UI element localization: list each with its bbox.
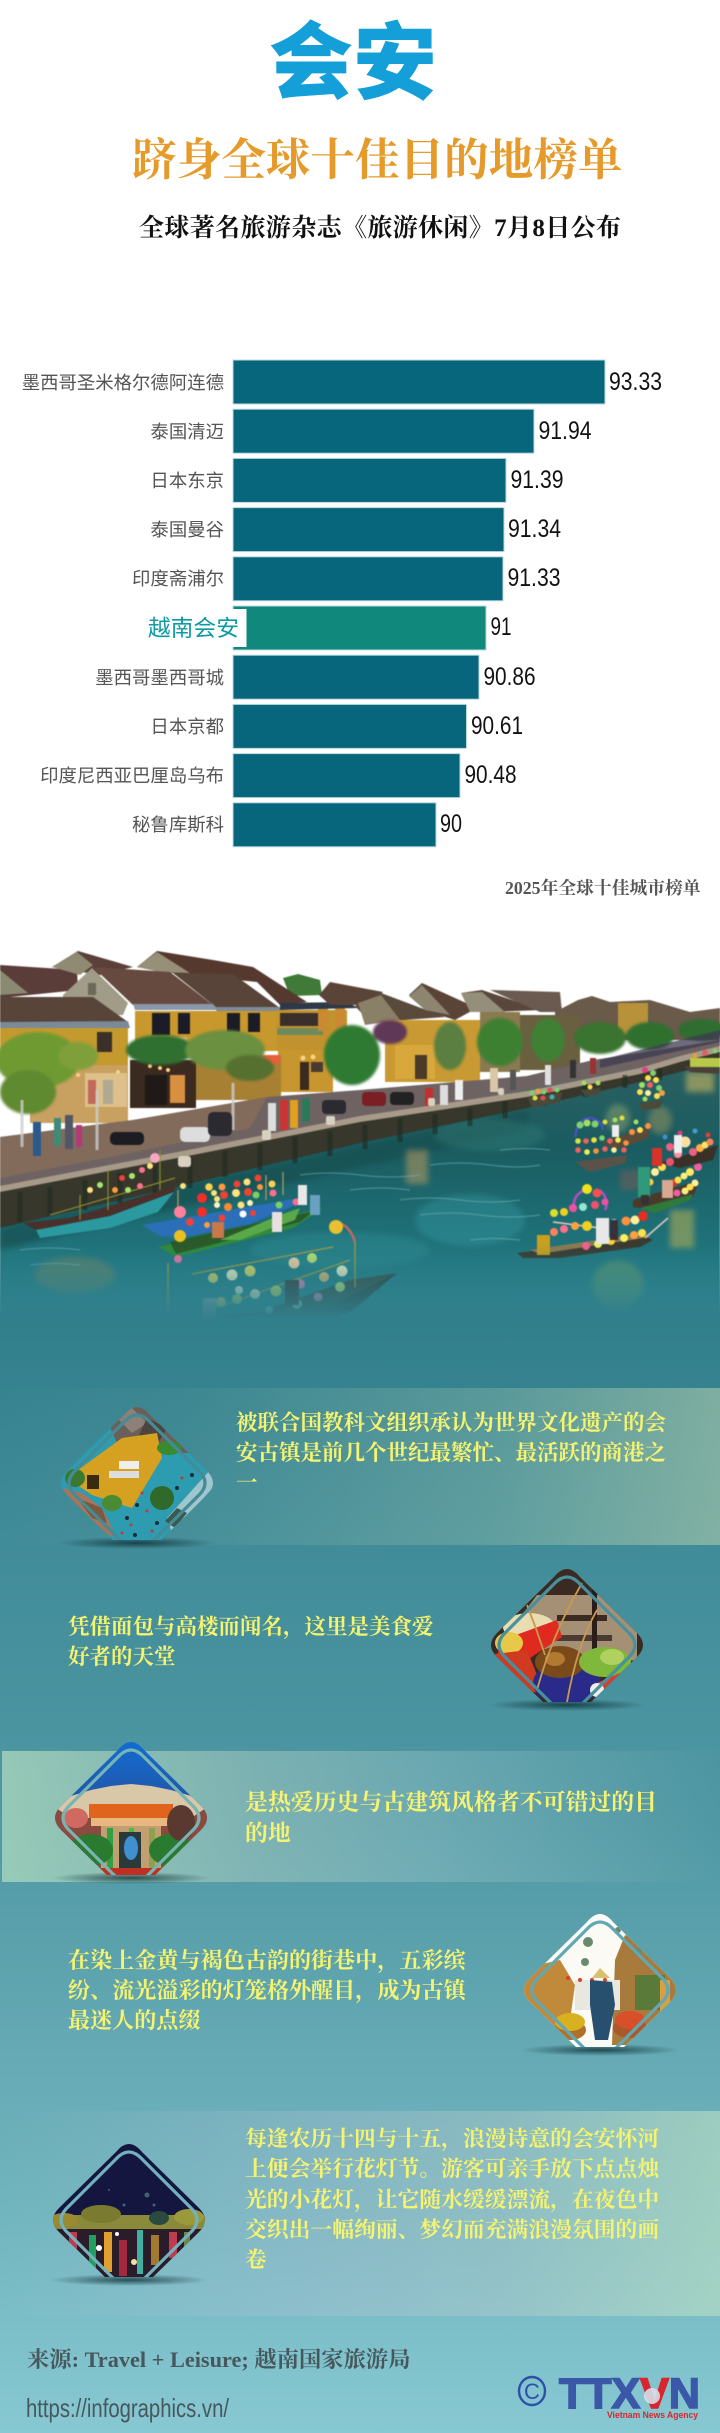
festival text: 交织出一幅绚丽、梦幻而充满浪漫氛围的画 bbox=[245, 2218, 659, 2242]
boat I, J, K, L bbox=[638, 1100, 663, 1110]
boat F bbox=[633, 1180, 700, 1210]
bar chart: top ten cities: 90.48 bbox=[464, 761, 516, 789]
bar chart: top ten cities: 91.94 bbox=[538, 417, 592, 445]
title: 会安 bbox=[269, 16, 437, 110]
buildings bbox=[0, 965, 78, 998]
bar chart: top ten cities: 91.39 bbox=[510, 466, 564, 494]
logo: TTXVN: Vietnam News Agency bbox=[607, 2410, 699, 2421]
festival text: 上便会举行花灯节。游客可亲手放下点点烛 bbox=[245, 2157, 659, 2181]
people and scooters bbox=[33, 1030, 720, 1167]
photo: Hoi An riverside with lantern boats bbox=[0, 950, 720, 1320]
festival text: 卷 bbox=[245, 2248, 267, 2272]
history text: 的地 bbox=[245, 1821, 291, 1846]
icon: heritage town aerial diamond bbox=[61, 1407, 213, 1548]
boat G bbox=[602, 1126, 650, 1150]
boat E bbox=[517, 1237, 653, 1258]
source line: 来源: Travel + Leisure; 越南国家旅游局 bbox=[27, 2347, 410, 2372]
bar chart: top ten cities: 日本京都 bbox=[150, 716, 224, 737]
bar chart: top ten cities: 越南会安 bbox=[148, 615, 239, 641]
icon: night river diamond bbox=[53, 2144, 205, 2286]
trees bbox=[0, 1018, 720, 1114]
bar chart: top ten cities: 泰国清迈 bbox=[150, 421, 224, 442]
subtitle: 跻身全球十佳目的地榜单 bbox=[132, 135, 623, 185]
panel: history and architecture bbox=[2, 1751, 720, 1882]
heritage text bbox=[236, 1411, 666, 1495]
boat D, faded in water bbox=[202, 1273, 397, 1317]
heritage text: 一 bbox=[236, 1471, 258, 1495]
bar chart: top ten cities: 日本东京 bbox=[150, 470, 224, 491]
heritage text: 安古镇是前几个世纪最繁忙、最活跃的商港之 bbox=[236, 1441, 666, 1465]
bar chart: top ten cities: 泰国曼谷 bbox=[150, 519, 224, 540]
bar chart: top ten cities: 印度斋浦尔 bbox=[132, 568, 224, 589]
panel: lantern festival bbox=[0, 2111, 720, 2316]
bar chart: top ten cities: 秘鲁库斯科 bbox=[132, 814, 224, 835]
text: lanterns bbox=[68, 1948, 466, 2033]
bar chart: top ten cities bbox=[22, 360, 662, 848]
heritage text: 被联合国教科文组织承认为世界文化遗产的会 bbox=[236, 1411, 666, 1435]
bar chart: top ten cities: 91.34 bbox=[508, 515, 561, 543]
logo: TTXVN: C bbox=[524, 2379, 540, 2404]
fade into teal bbox=[0, 1245, 720, 1320]
text: food: 好者的天堂 bbox=[68, 1645, 176, 1669]
text: lanterns: 在染上金黄与褐色古韵的街巷中，五彩缤 bbox=[68, 1948, 466, 1973]
festival text bbox=[245, 2127, 659, 2272]
bar chart: top ten cities: 90 bbox=[440, 810, 462, 838]
text: lanterns: 纷、流光溢彩的灯笼格外醒目，成为古镇 bbox=[68, 1978, 466, 2003]
chart caption: 2025年全球十佳城市榜单 bbox=[505, 878, 701, 898]
festival text: 每逢农历十四与十五，浪漫诗意的会安怀河 bbox=[245, 2127, 659, 2151]
text: food bbox=[68, 1615, 434, 1669]
bar chart: top ten cities: 91.33 bbox=[508, 564, 560, 592]
boat A bbox=[23, 1186, 176, 1230]
text: lanterns: 最迷人的点缀 bbox=[68, 2008, 201, 2033]
boat B and C bbox=[142, 1198, 307, 1238]
publication line: 全球著名旅游杂志《旅游休闲》7月8日公布 bbox=[139, 215, 621, 242]
section background gradient bbox=[0, 1320, 720, 2433]
curb and embankment wall bbox=[0, 1050, 720, 1228]
lit storefronts bbox=[30, 1065, 128, 1123]
bar chart: top ten cities: 91 bbox=[490, 613, 512, 641]
text: food: 凭借面包与高楼而闻名，这里是美食爱 bbox=[68, 1615, 434, 1639]
history text bbox=[245, 1790, 657, 1846]
history text: 是热爱历史与古建筑风格者不可错过的目 bbox=[245, 1790, 657, 1815]
bar chart: top ten cities: 90.61 bbox=[471, 712, 523, 740]
icon: lantern street diamond bbox=[524, 1914, 676, 2056]
bar chart: top ten cities: 90.86 bbox=[484, 663, 536, 691]
bar chart: top ten cities: 墨西哥圣米格尔德阿连德 bbox=[22, 372, 224, 393]
tree trunks bbox=[22, 1083, 233, 1150]
bar chart: top ten cities: 墨西哥墨西哥城 bbox=[95, 667, 224, 688]
panel: heritage bbox=[0, 1388, 720, 1545]
bar chart: top ten cities: 印度尼西亚巴厘岛乌布 bbox=[40, 765, 224, 786]
boat H bbox=[660, 1145, 718, 1168]
road bbox=[0, 1040, 720, 1190]
icon: covered bridge diamond bbox=[55, 1742, 207, 1884]
bar chart: top ten cities: 93.33 bbox=[609, 368, 662, 396]
festival text: 光的小花灯，让它随水缓缓漂流，在夜色中 bbox=[245, 2188, 659, 2212]
river bbox=[0, 1050, 720, 1330]
icon: food diamond bbox=[491, 1569, 643, 1710]
